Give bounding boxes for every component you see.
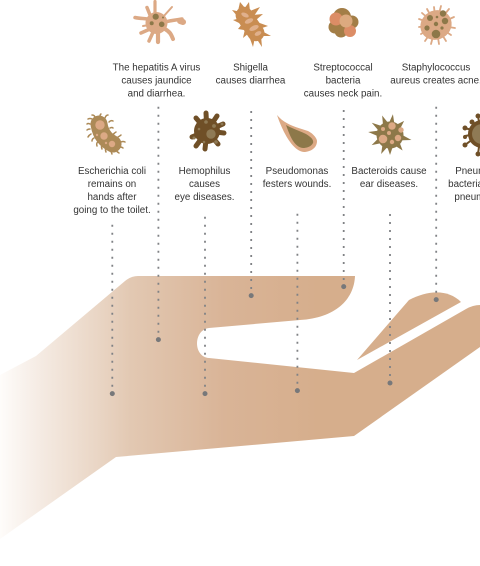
label: Pseudomonas: Pseudomonas [266, 166, 328, 177]
label: Staphylococcus: Staphylococcus [402, 62, 470, 74]
label: hepatitis A virus: The hepatitis A virus [113, 62, 200, 74]
label: Bacteroids: ear diseases. [360, 179, 418, 190]
label: Streptococcal: causes neck pain. [304, 88, 382, 100]
label: hepatitis A virus: and diarrhea. [128, 88, 185, 100]
dotted line: Pseudomonas [295, 214, 300, 393]
label: Hemophilus: Hemophilus [179, 166, 230, 177]
label: Hemophilus: causes [189, 179, 220, 190]
icon: Bacteroids [368, 114, 412, 155]
icon: Pneumonia bacteria [462, 114, 480, 156]
label: Escherichia coli: remains on [88, 179, 136, 190]
label: Shigella: Shigella [233, 62, 268, 74]
icon: Escherichia coli [87, 114, 125, 154]
dotted line: Bacteroids [388, 214, 392, 386]
dotted line: Hemophilus [202, 217, 208, 396]
label: Pseudomonas: festers wounds. [263, 179, 331, 190]
icon: Pseudomonas [277, 115, 317, 152]
dotted line: Shigella [249, 111, 254, 298]
label: hepatitis A virus: causes jaundice [121, 76, 192, 86]
label: Staphylococcus: aureus creates acne. [390, 76, 480, 86]
dotted line: Staphylococcus [434, 107, 439, 302]
dotted line: Escherichia coli [110, 225, 115, 396]
icon: Streptococcal bacteria [328, 8, 358, 38]
label: Escherichia coli: going to the toilet. [73, 205, 151, 216]
icon: Staphylococcus aureus [415, 4, 457, 46]
label: Streptococcal: Streptococcal [313, 62, 373, 74]
dotted line: Streptococcal [341, 110, 346, 289]
dotted line: hepatitis A virus [156, 107, 161, 342]
label: Hemophilus: eye diseases. [175, 192, 234, 203]
icon: hepatitis A virus [135, 2, 183, 42]
label: Streptococcal: bacteria [326, 76, 361, 86]
label: Shigella: causes diarrhea [216, 76, 286, 86]
label: Escherichia coli: Escherichia coli [78, 166, 146, 177]
illustration: thumb [357, 292, 461, 360]
icon: Hemophilus [192, 113, 224, 149]
illustration: hand [0, 276, 480, 539]
label: Bacteroids: Bacteroids cause [351, 166, 427, 177]
icon: Shigella [232, 2, 271, 47]
label: Escherichia coli: hands after [87, 192, 137, 203]
